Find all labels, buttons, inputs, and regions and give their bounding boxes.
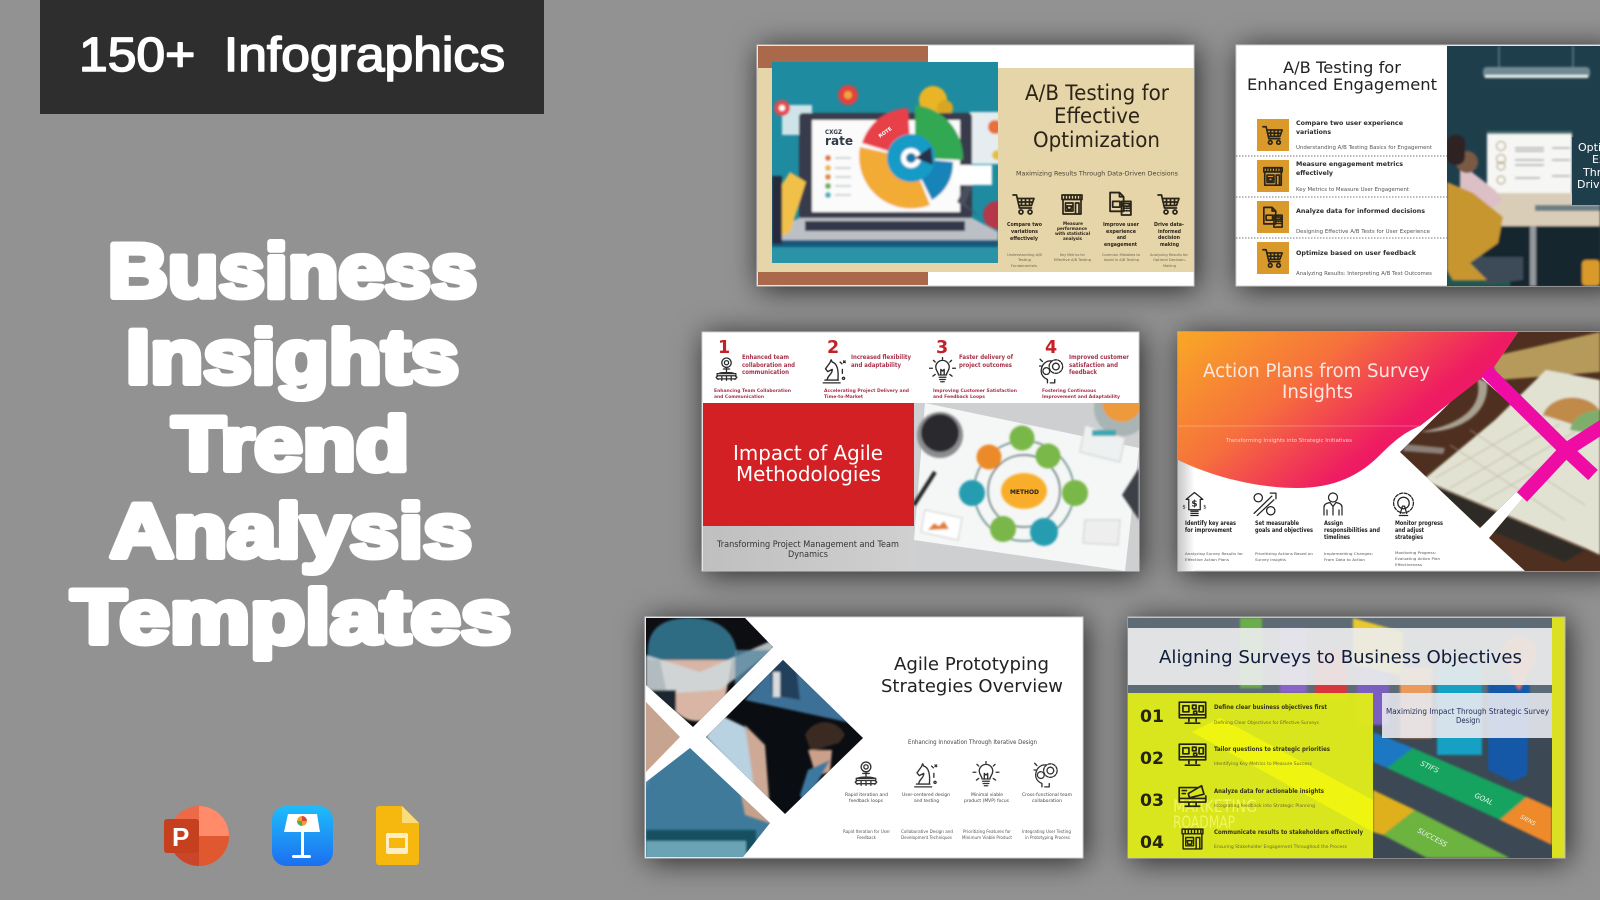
- action captions: Effectiveness: [1395, 562, 1422, 567]
- feature captions: Effective A/B Testing: [1054, 258, 1091, 262]
- benefit labels: project outcomes: [959, 363, 1013, 369]
- action labels: [1185, 521, 1443, 541]
- numbers: [718, 338, 1057, 358]
- action labels: strategies: [1395, 535, 1423, 541]
- strategy captions: Development Techniques: [901, 835, 953, 841]
- action labels: goals and objectives: [1255, 528, 1313, 534]
- icons: [1179, 702, 1206, 849]
- photo: report on desk: [1395, 332, 1600, 571]
- list headings: Measure engagement metrics: [1296, 161, 1403, 168]
- strategy labels: [845, 792, 1073, 804]
- strategy captions: in Prototyping Process: [1025, 835, 1071, 841]
- action labels: Identify key areas: [1185, 521, 1236, 527]
- slide title: [1025, 81, 1169, 152]
- strategy labels: Rapid iteration and: [845, 792, 888, 798]
- feature labels: [1007, 221, 1184, 248]
- photo: method diagram on desk: [914, 403, 1139, 571]
- strategy labels: feedback loops: [849, 798, 884, 804]
- main title: Business: [108, 229, 477, 314]
- benefit captions: Fostering Continuous: [1042, 388, 1096, 394]
- benefit labels: satisfaction and: [1069, 363, 1118, 369]
- strategy captions: Feedback: [857, 835, 876, 841]
- icon: PowerPoint: [164, 806, 229, 866]
- objective captions: Ensuring Stakeholder Engagement Throughout the Process: [1214, 844, 1348, 850]
- faint roadmap text: MARKETING: [1173, 797, 1257, 817]
- subtitle: Transforming Insights into Strategic Initiatives: [1225, 438, 1352, 444]
- slide title: Agile Prototyping: [894, 654, 1049, 675]
- feature captions: Optimal Decision-: [1153, 258, 1187, 262]
- slide title: A/B Testing for: [1283, 58, 1401, 77]
- slide title: Insights: [1282, 382, 1353, 403]
- slide title: [881, 654, 1063, 697]
- feature captions: Understanding A/B: [1007, 253, 1043, 257]
- feature captions: Common Mistakes to: [1102, 253, 1140, 257]
- benefit captions: Accelerating Project Delivery and: [824, 388, 909, 394]
- icons row: [1013, 193, 1179, 215]
- feature labels: engagement: [1104, 242, 1137, 248]
- subtitle: Maximizing Results Through Data-Driven Decisions: [1016, 170, 1179, 178]
- benefit captions: Time-to-Market: [824, 394, 864, 400]
- photo: roadmap towers: SIENS: [1519, 814, 1537, 828]
- pink cross: [1486, 371, 1600, 497]
- title band: [1128, 628, 1552, 685]
- benefit captions: Enhancing Team Collaboration: [714, 388, 791, 394]
- strategy labels: and testing: [914, 798, 939, 804]
- photo: roadmap towers: SUCCESS: [1416, 827, 1449, 849]
- list captions: Understanding A/B Testing Basics for Engagement: [1296, 145, 1432, 151]
- feature captions: Making: [1163, 264, 1176, 268]
- feature captions: Fundamentals: [1011, 264, 1037, 268]
- strategy labels: product (MVP) focus: [964, 798, 1010, 804]
- photo: roadmap towers: GOAL: [1473, 792, 1494, 807]
- action labels: responsibilities and: [1324, 528, 1380, 534]
- action labels: Monitor progress: [1395, 521, 1443, 527]
- strategy labels: User-centered design: [902, 792, 950, 798]
- feature labels: decision: [1158, 235, 1180, 241]
- red title panel: [703, 403, 914, 526]
- benefit labels: Faster delivery of: [959, 355, 1013, 361]
- photo overlay text: [1578, 143, 1600, 188]
- numbers: 1: [718, 338, 730, 358]
- feature labels: performance: [1057, 226, 1087, 232]
- feature labels: Improve user: [1103, 222, 1139, 228]
- action labels: Assign: [1324, 521, 1343, 527]
- benefit captions: [714, 388, 1120, 400]
- slide title: [733, 441, 883, 486]
- action labels: timelines: [1324, 535, 1350, 541]
- subtitle box: [1382, 693, 1552, 738]
- benefit captions: and Communication: [714, 394, 764, 400]
- icons: [855, 762, 1057, 787]
- benefit labels: Improved customer: [1069, 355, 1129, 361]
- benefit labels: communication: [742, 370, 789, 376]
- slide title: A/B Testing for: [1025, 81, 1169, 105]
- feature captions: Key Metrics for: [1060, 253, 1085, 257]
- icon: Google Slides: [376, 806, 419, 865]
- icon: Keynote: [272, 806, 333, 866]
- slide title: [1247, 58, 1437, 94]
- illustration: laptop with pie chart: rate: [825, 134, 853, 148]
- feature labels: Measure: [1063, 221, 1083, 227]
- feature captions: Testing: [1017, 258, 1031, 262]
- photo: team meeting: [1447, 46, 1600, 286]
- illustration: laptop with pie chart: [772, 62, 1011, 263]
- feature labels: and: [1117, 235, 1126, 241]
- feature captions: Avoid in A/B Testing: [1104, 258, 1139, 262]
- list captions: Analyzing Results: Interpreting A/B Test Outcomes: [1296, 271, 1432, 277]
- list headings: Analyze data for informed decisions: [1296, 208, 1425, 215]
- benefit captions: and Feedback Loops: [933, 394, 985, 400]
- yellow list panel: [1128, 693, 1373, 858]
- list headings: Compare two user experience: [1296, 120, 1403, 127]
- objective captions: Identifying Key Metrics to Measure Success: [1214, 761, 1313, 767]
- illustration: laptop with pie chart: ROTE: [878, 126, 894, 140]
- action labels: Set measurable: [1255, 521, 1299, 527]
- feature captions: Analyzing Results for: [1150, 253, 1189, 257]
- action captions: Implementing Changes:: [1324, 551, 1373, 556]
- list headings: [1296, 120, 1425, 257]
- strategy labels: Cross-functional team: [1022, 792, 1073, 798]
- subtitle: Maximizing Impact Through Strategic Survey: [1386, 707, 1549, 716]
- strategy captions: [843, 829, 1071, 841]
- photo: roadmap towers: [1128, 618, 1552, 858]
- faint roadmap text: ROADMAP: [1173, 813, 1235, 833]
- numbers: 01: [1140, 707, 1164, 726]
- benefit labels: [742, 355, 1129, 376]
- slide title: [1203, 361, 1430, 403]
- slide title: Strategies Overview: [881, 676, 1063, 697]
- slide title: Effective: [1054, 104, 1140, 128]
- benefit labels: feedback: [1069, 370, 1097, 376]
- subtitle: Dynamics: [788, 550, 828, 560]
- slide: Agile Prototyping Strategies Overview: [645, 617, 1083, 858]
- slide: A/B Testing for Enhanced Engagement: [1236, 45, 1600, 286]
- strategy captions: Collaborative Design and: [901, 829, 953, 835]
- feature labels: analysis: [1063, 236, 1082, 242]
- main title: [71, 229, 511, 660]
- action captions: Effective Action Plans: [1185, 557, 1229, 562]
- feature labels: Compare two: [1007, 222, 1042, 228]
- main title: Analysis: [110, 489, 472, 574]
- numbers: 3: [936, 338, 948, 358]
- subtitle: [716, 540, 899, 560]
- numbers: 03: [1140, 791, 1164, 810]
- objective headings: Define clear business objectives first: [1214, 704, 1327, 711]
- action labels: and adjust: [1395, 528, 1424, 534]
- slide title: Aligning Surveys to Business Objectives: [1159, 647, 1522, 668]
- icon tiles: [1257, 119, 1289, 274]
- objective headings: Tailor questions to strategic priorities: [1214, 746, 1330, 753]
- objective headings: Analyze data for actionable insights: [1214, 788, 1324, 795]
- feature labels: Drive data-: [1154, 222, 1184, 228]
- action captions: From Data to Action: [1324, 557, 1366, 562]
- action captions: Survey Insights: [1255, 557, 1286, 562]
- slide title: Methodologies: [736, 462, 881, 486]
- strategy captions: Rapid Iteration for User: [843, 829, 890, 835]
- main title: Trend: [172, 402, 409, 487]
- slide: Aligning Surveys to Business Objectives: [1128, 617, 1565, 858]
- objective headings: [1214, 704, 1363, 836]
- feature labels: informed: [1158, 229, 1181, 235]
- photo collage: [646, 618, 863, 858]
- benefit captions: Improvement and Adaptability: [1042, 394, 1120, 400]
- objective headings: Communicate results to stakeholders effectively: [1214, 829, 1363, 836]
- list captions: [1296, 145, 1432, 277]
- icons: [716, 358, 1063, 383]
- subtitle: Enhancing Innovation Through Iterative Design: [908, 740, 1037, 746]
- action captions: Prioritizing Actions Based on: [1255, 551, 1314, 556]
- main title: Insights: [126, 315, 459, 400]
- slide title: Action Plans from Survey: [1203, 361, 1430, 382]
- list headings: effectively: [1296, 170, 1333, 177]
- header banner: [40, 0, 544, 114]
- feature labels: with statistical: [1055, 231, 1090, 237]
- illustration: laptop with pie chart: CXGZ: [825, 129, 843, 136]
- benefit labels: and adaptability: [851, 363, 901, 369]
- numbers: 02: [1140, 749, 1164, 768]
- subtitle: [1386, 707, 1549, 725]
- photo: method diagram on desk: METHOD: [1010, 488, 1040, 496]
- strategy captions: Integrating User Testing: [1022, 829, 1071, 835]
- numbers: 04: [1140, 833, 1164, 852]
- feature labels: experience: [1106, 229, 1136, 235]
- numbers: 2: [827, 338, 839, 358]
- gray subtitle panel: [703, 526, 914, 571]
- strategy captions: Prioritizing Features for: [963, 829, 1011, 835]
- subtitle: Design: [1456, 716, 1480, 725]
- action captions: Monitoring Progress:: [1395, 550, 1436, 555]
- benefit labels: collaboration and: [742, 363, 795, 369]
- icons: [1182, 493, 1413, 515]
- list headings: variations: [1296, 129, 1331, 136]
- subtitle: Transforming Project Management and Team: [716, 540, 899, 550]
- gradient wave banner: [1178, 332, 1518, 488]
- action captions: Analyzing Survey Results for: [1185, 551, 1243, 556]
- slide title: Impact of Agile: [733, 441, 883, 465]
- slide: Impact of Agile Methodologies: [702, 332, 1150, 571]
- photo: roadmap towers: STIFS: [1419, 760, 1440, 775]
- feature labels: effectively: [1010, 236, 1039, 242]
- feature captions: [1007, 253, 1189, 268]
- main title: Templates: [71, 575, 511, 660]
- strategy captions: Minimum Viable Product: [962, 835, 1012, 841]
- list captions: Key Metrics to Measure User Engagement: [1296, 187, 1409, 193]
- strategy labels: Minimal viable: [971, 792, 1003, 798]
- icon: PowerPoint: P: [172, 822, 189, 852]
- action labels: for improvement: [1185, 528, 1232, 534]
- action captions: Evaluating Action Plan: [1395, 556, 1441, 561]
- slide title: Optimization: [1033, 128, 1160, 152]
- faint roadmap text: [1173, 797, 1257, 833]
- slide: Action Plans from Survey Insights: [1178, 332, 1600, 571]
- numbers: 4: [1045, 338, 1057, 358]
- strategy labels: collaboration: [1032, 798, 1062, 804]
- list captions: Designing Effective A/B Tests for User Experience: [1296, 229, 1430, 235]
- list headings: Optimize based on user feedback: [1296, 250, 1417, 257]
- objective captions: Defining Clear Objectives for Effective Surveys: [1214, 720, 1320, 726]
- feature labels: variations: [1011, 229, 1038, 235]
- benefit labels: Increased flexibility: [851, 355, 911, 361]
- benefit labels: Enhanced team: [742, 355, 789, 361]
- slide title: Enhanced Engagement: [1247, 75, 1437, 94]
- banner label: 150+ Infographics: [79, 29, 505, 82]
- objective captions: Integrating feedback into Strategic Planning: [1214, 803, 1315, 809]
- action captions: [1185, 550, 1441, 567]
- objective captions: [1214, 720, 1348, 850]
- numbers: [1140, 707, 1164, 852]
- benefit captions: Improving Customer Satisfaction: [933, 388, 1017, 394]
- feature labels: making: [1160, 242, 1179, 248]
- slide: A/B Testing for Effective Optimization: [757, 45, 1194, 286]
